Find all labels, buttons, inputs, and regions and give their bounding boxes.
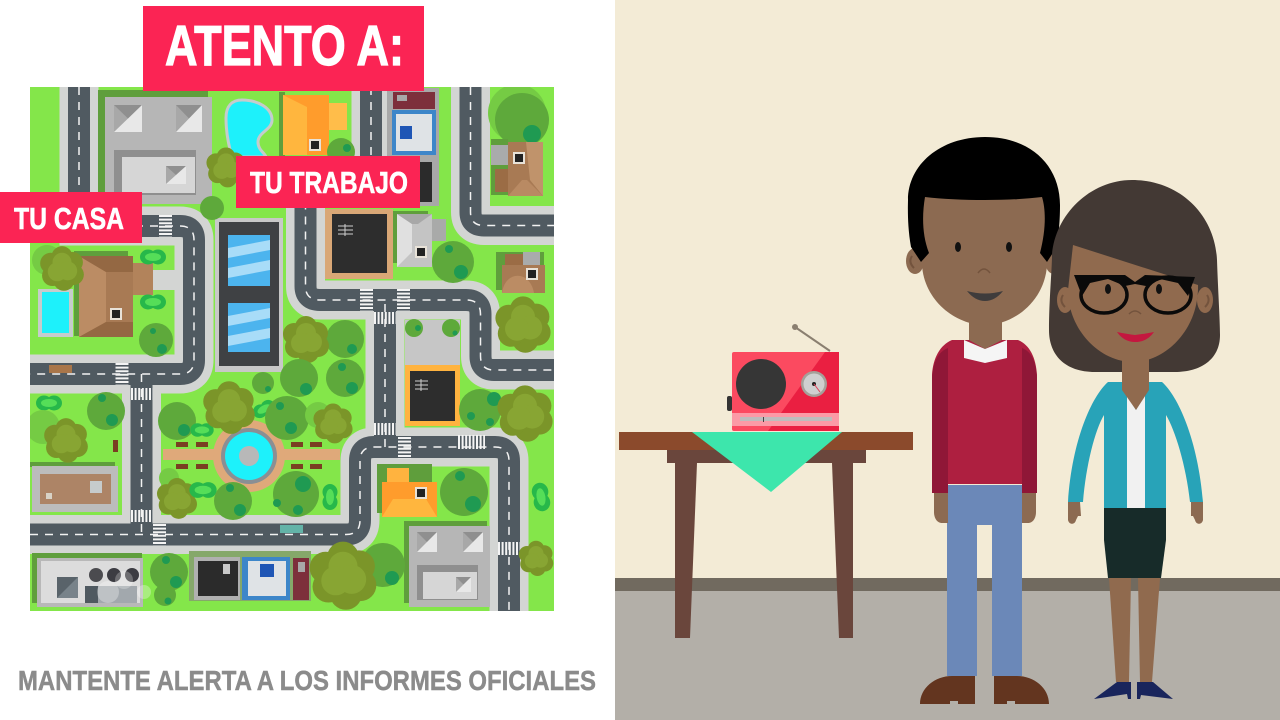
orange house top: [279, 92, 355, 156]
room background: [615, 0, 1280, 720]
ears: [1057, 287, 1213, 313]
sweater: [932, 340, 1037, 493]
label: TU TRABAJO: [236, 156, 420, 208]
hands: [1068, 502, 1081, 524]
man: [906, 137, 1063, 704]
yellow-framed building: [405, 320, 460, 426]
dial: [801, 371, 827, 397]
factory bottom left: [32, 553, 151, 607]
vehicles: [49, 365, 303, 533]
hands: [934, 493, 948, 523]
face: [1068, 245, 1198, 362]
pool top: [226, 100, 272, 157]
eyes: [955, 242, 961, 252]
radio: [727, 324, 839, 431]
dark building with tan frame: [325, 209, 393, 279]
glasses: [1074, 275, 1195, 313]
label: TU TRABAJO: TU TRABAJO: [250, 165, 408, 200]
grey building top left: [98, 90, 212, 204]
grey house: [393, 211, 446, 267]
brown house left: [74, 251, 175, 337]
white left panel: [0, 0, 615, 720]
neck: [969, 315, 1002, 349]
lips: [1117, 332, 1154, 342]
neck: [1122, 350, 1149, 410]
orange house bottom: [377, 464, 437, 517]
apartment tower: [215, 218, 283, 372]
park with fountain: [113, 420, 340, 492]
nose: [1129, 311, 1141, 314]
woman: [1049, 180, 1220, 699]
collar: [964, 340, 1007, 363]
label: TU CASA: [0, 192, 142, 243]
mouth: [967, 291, 1003, 301]
jacket: [1068, 382, 1203, 508]
shirt: [1127, 395, 1145, 508]
tree and brown house top right: [488, 87, 549, 196]
eyes: [1105, 284, 1111, 294]
table cloth: [692, 432, 842, 492]
title banner: ATENTO A: ATENTO A:: [165, 14, 404, 78]
maroon and blue buildings: [387, 88, 439, 206]
table: [619, 432, 913, 638]
shoes: [920, 676, 975, 704]
crosswalks: [122, 215, 520, 548]
shoes: [1094, 682, 1131, 699]
lane dashes: [30, 87, 554, 611]
nose: [978, 269, 990, 273]
sidewalks: [30, 87, 554, 611]
grey building bottom right: [404, 521, 490, 607]
pool left: [38, 289, 73, 337]
caption: MANTENTE ALERTA A LOS INFORMES OFICIALES: [18, 665, 596, 696]
label: TU CASA: TU CASA: [14, 201, 124, 236]
brown flat building: [30, 462, 118, 512]
trees and bushes: [26, 147, 553, 610]
hair: [1049, 180, 1220, 372]
skirt: [1104, 508, 1166, 578]
roads: [30, 87, 554, 611]
ears: [906, 248, 1063, 274]
row of buildings bottom: [189, 551, 311, 601]
speaker: [736, 359, 786, 409]
hair: [908, 137, 1060, 262]
small brown house: [496, 252, 545, 293]
city map: [26, 84, 554, 611]
legs: [1109, 578, 1131, 682]
legs and trousers: [947, 485, 1022, 676]
head: [922, 197, 1047, 325]
title banner: ATENTO A: [143, 6, 424, 91]
